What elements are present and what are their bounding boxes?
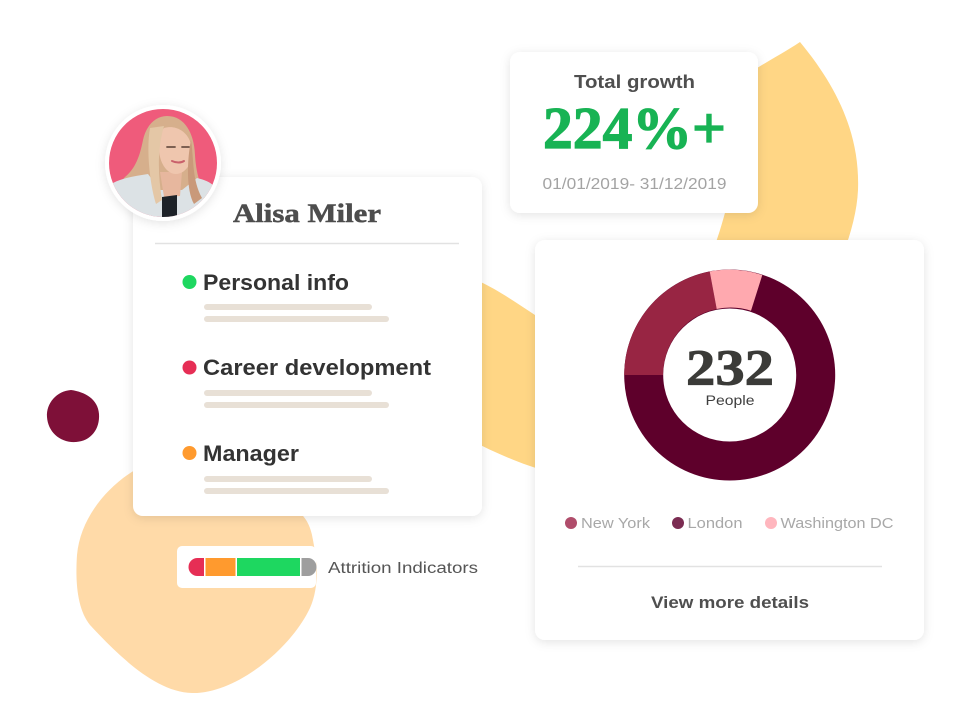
panel: total growth: 01/01/2019- 31/12/2019 (542, 176, 726, 193)
legend (565, 516, 894, 532)
yellow background blob (432, 42, 858, 478)
link: view more details: View more details (651, 593, 809, 612)
donut chart: 232 (686, 341, 774, 397)
panel: attrition indicators: Attrition Indicators (328, 560, 478, 577)
avatar photo (105, 105, 221, 222)
donut chart (624, 270, 835, 480)
dark maroon blob (47, 390, 99, 442)
item: manager: Manager (203, 441, 299, 466)
legend: London (688, 516, 742, 532)
name heading: Alisa Miler (233, 199, 381, 228)
panel: total growth (510, 52, 758, 213)
item: personal info: Personal info (203, 270, 349, 295)
panel: total growth: Total growth (574, 71, 695, 92)
panel: profile card (133, 177, 482, 516)
item: career development (182, 355, 432, 408)
item: personal info (182, 270, 389, 322)
indicator bar (188, 558, 316, 576)
panel: people donut (535, 240, 924, 640)
item: career development: Career development (203, 355, 432, 380)
legend: Washington DC (780, 516, 894, 532)
growth figure: 224%+ (543, 95, 726, 161)
peach background blob (76, 470, 317, 693)
donut chart: People (706, 393, 754, 408)
item: manager (182, 441, 389, 494)
panel: attrition indicators (177, 546, 478, 588)
legend: New York (581, 516, 651, 532)
